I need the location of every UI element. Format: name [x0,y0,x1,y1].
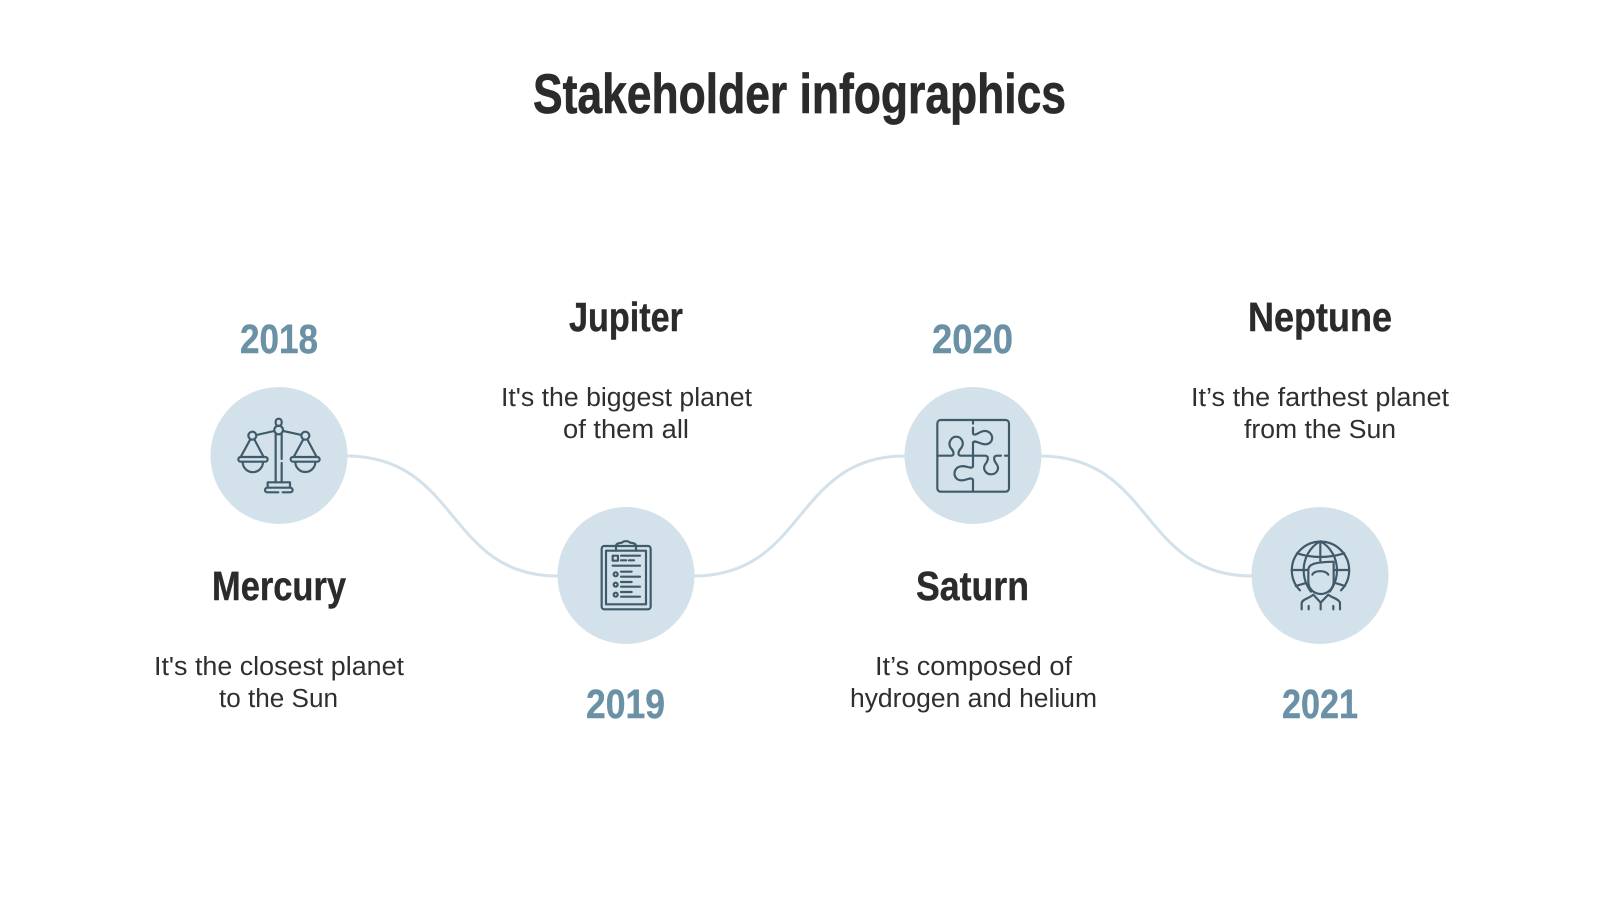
year 2020: 2020 [932,316,1013,362]
stage: Mercury 2018 [154,316,404,713]
description: Saturn: hydrogen and helium [850,685,1097,713]
icon: puzzle [937,420,1009,492]
description: Jupiter: of them all [563,416,689,444]
circle: Saturn [904,387,1042,524]
timeline connector curves [346,456,1252,576]
year 2021: 2021 [1282,681,1358,727]
description: Neptune: from the Sun [1244,416,1396,444]
title: Stakeholder infographics [533,62,1066,125]
heading: Neptune: Neptune [1248,294,1392,340]
heading: Mercury: Mercury [212,563,346,609]
heading: Saturn: Saturn [916,563,1029,609]
description: Mercury: to the Sun [219,685,338,713]
description: Mercury [154,653,404,713]
circle: Jupiter [558,507,694,644]
icon: balance scale [238,419,320,492]
stage: Saturn 2020 [850,316,1097,713]
year 2018: 2018 [240,316,318,362]
description: Neptune: It’s the farthest planet [1191,384,1449,412]
icon: globe with person [1292,541,1349,609]
circle: Mercury [210,387,348,524]
icon: clipboard [602,541,651,609]
stage: Jupiter 2019 [501,294,752,727]
description: Neptune [1191,384,1449,444]
description: Jupiter: It's the biggest planet [501,384,752,412]
year 2019: 2019 [586,681,665,727]
description: Jupiter [501,384,752,444]
description: Mercury: It's the closest planet [154,653,404,681]
description: Saturn: It’s composed of [875,653,1073,681]
heading: Jupiter: Jupiter [569,294,683,340]
description: Saturn [850,653,1097,713]
stage: Neptune 2021 [1191,294,1449,727]
circle: Neptune [1252,507,1388,644]
